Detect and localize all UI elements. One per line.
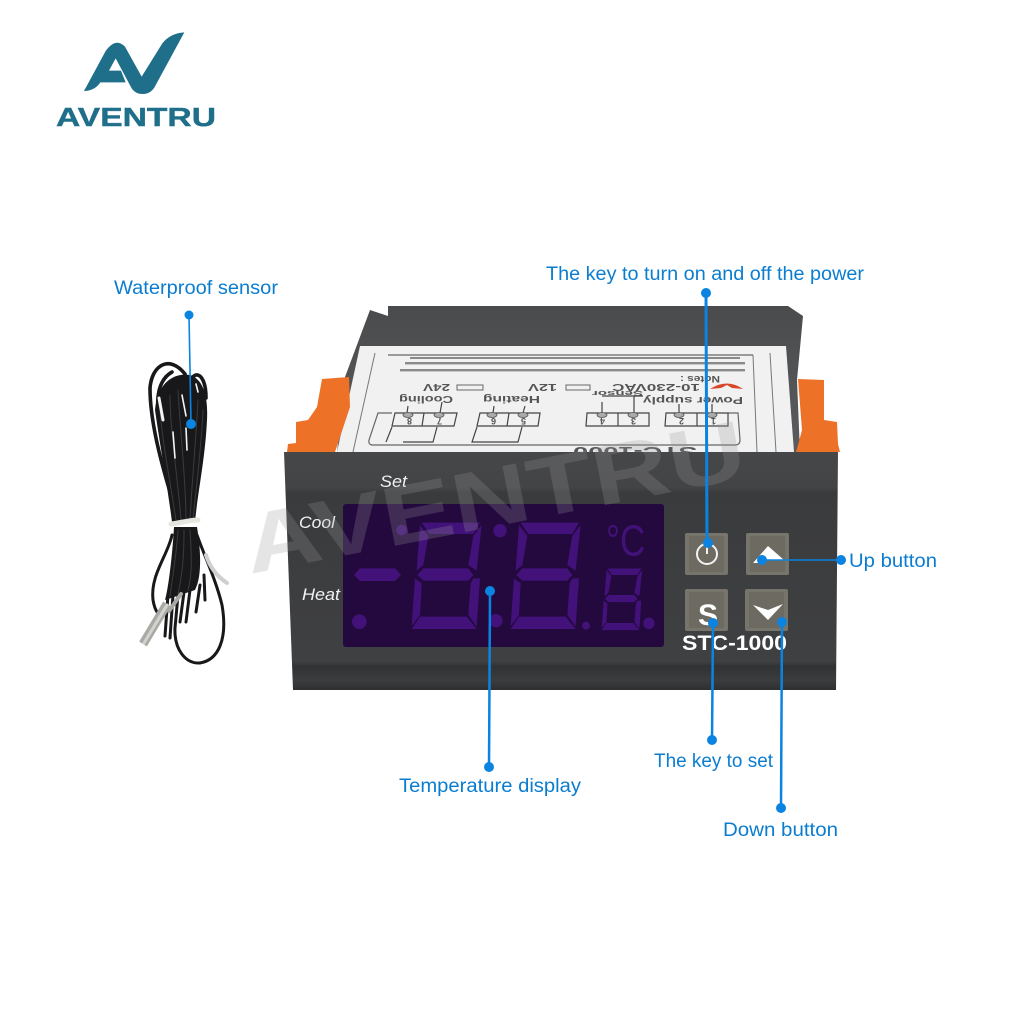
callout: temperature display (399, 586, 582, 797)
orange clip left (287, 377, 350, 452)
down button (745, 589, 788, 631)
sensor tie (171, 520, 198, 524)
upside-down label text: 5 (521, 416, 526, 426)
upside-down label text: Power supply (642, 394, 743, 405)
set button (685, 589, 728, 632)
upside-down label text: 2 (679, 416, 684, 426)
check boxes (457, 385, 590, 390)
upside-down label text: Cooling (399, 393, 453, 404)
upside-down label text: 8 (407, 416, 412, 426)
small metal probe (169, 594, 181, 611)
callout: power key: The key to turn on and off the power (546, 264, 865, 285)
upside-down label text: Heating (483, 393, 540, 404)
logo mark: AV (84, 32, 184, 94)
upside-down label text: 12V (527, 381, 557, 392)
indicator labels (299, 472, 408, 604)
upside-down label text: Sensor (591, 389, 643, 396)
logo: AVENTRU (56, 32, 216, 132)
indicator labels: Heat (302, 585, 341, 604)
callout: set key: The key to set (654, 751, 774, 772)
waterproof sensor cable (143, 364, 227, 663)
LCD unlit segments: °C (606, 517, 645, 565)
upside-down label text (399, 374, 743, 460)
indicator labels: Cool (299, 513, 336, 532)
watermark: AVENTRU (235, 402, 753, 592)
metal probe (143, 604, 167, 644)
logo wordmark: AVENTRU (56, 102, 216, 132)
LCD display (343, 504, 664, 647)
cable highlights (160, 390, 203, 520)
set button: S (698, 599, 718, 632)
rear housing (337, 306, 803, 452)
model name: STC-1000 (682, 632, 787, 655)
upside-down label text: 10-230VAC (612, 381, 700, 392)
callout: set key (654, 618, 774, 772)
callout: waterproof sensor: Waterproof sensor (114, 278, 279, 299)
grey wire (206, 555, 227, 583)
cable gaps (159, 384, 198, 458)
upside-down label text: STC-1000 (573, 443, 697, 460)
controller unit (284, 306, 840, 690)
notes text lines (400, 357, 745, 371)
front panel (284, 452, 838, 690)
indicator labels: Set (380, 472, 408, 491)
power button (685, 533, 728, 575)
wiring label (337, 346, 794, 460)
callout: power key (546, 264, 865, 548)
up button (746, 533, 789, 575)
callout: down button (723, 617, 838, 841)
LCD unlit segments (352, 517, 655, 630)
red mark (710, 384, 743, 389)
upper cable bundle (155, 375, 207, 522)
callout: down button: Down button (723, 820, 838, 841)
callout: temperature display: Temperature display (399, 776, 582, 797)
upside-down label text: 3 (631, 416, 636, 426)
lower cable bundle (165, 527, 200, 600)
upside-down label text: Notes : (680, 374, 720, 384)
upside-down label text: 7 (437, 416, 442, 426)
orange clip right (796, 379, 840, 452)
terminal blocks (386, 396, 728, 442)
LCD background (343, 504, 664, 647)
callout: up button: Up button (849, 551, 937, 572)
probe shine (144, 605, 167, 643)
callout: up button (757, 551, 937, 572)
upside-down label text: 4 (600, 416, 605, 426)
label outlines (353, 353, 776, 452)
label sheet (337, 346, 794, 452)
upside-down label text: 24V (423, 381, 450, 392)
upside-down label text: 6 (491, 416, 496, 426)
upside-down label text: 1 (711, 416, 716, 426)
lower cable highlights (170, 530, 191, 596)
callout: waterproof sensor (114, 278, 279, 429)
